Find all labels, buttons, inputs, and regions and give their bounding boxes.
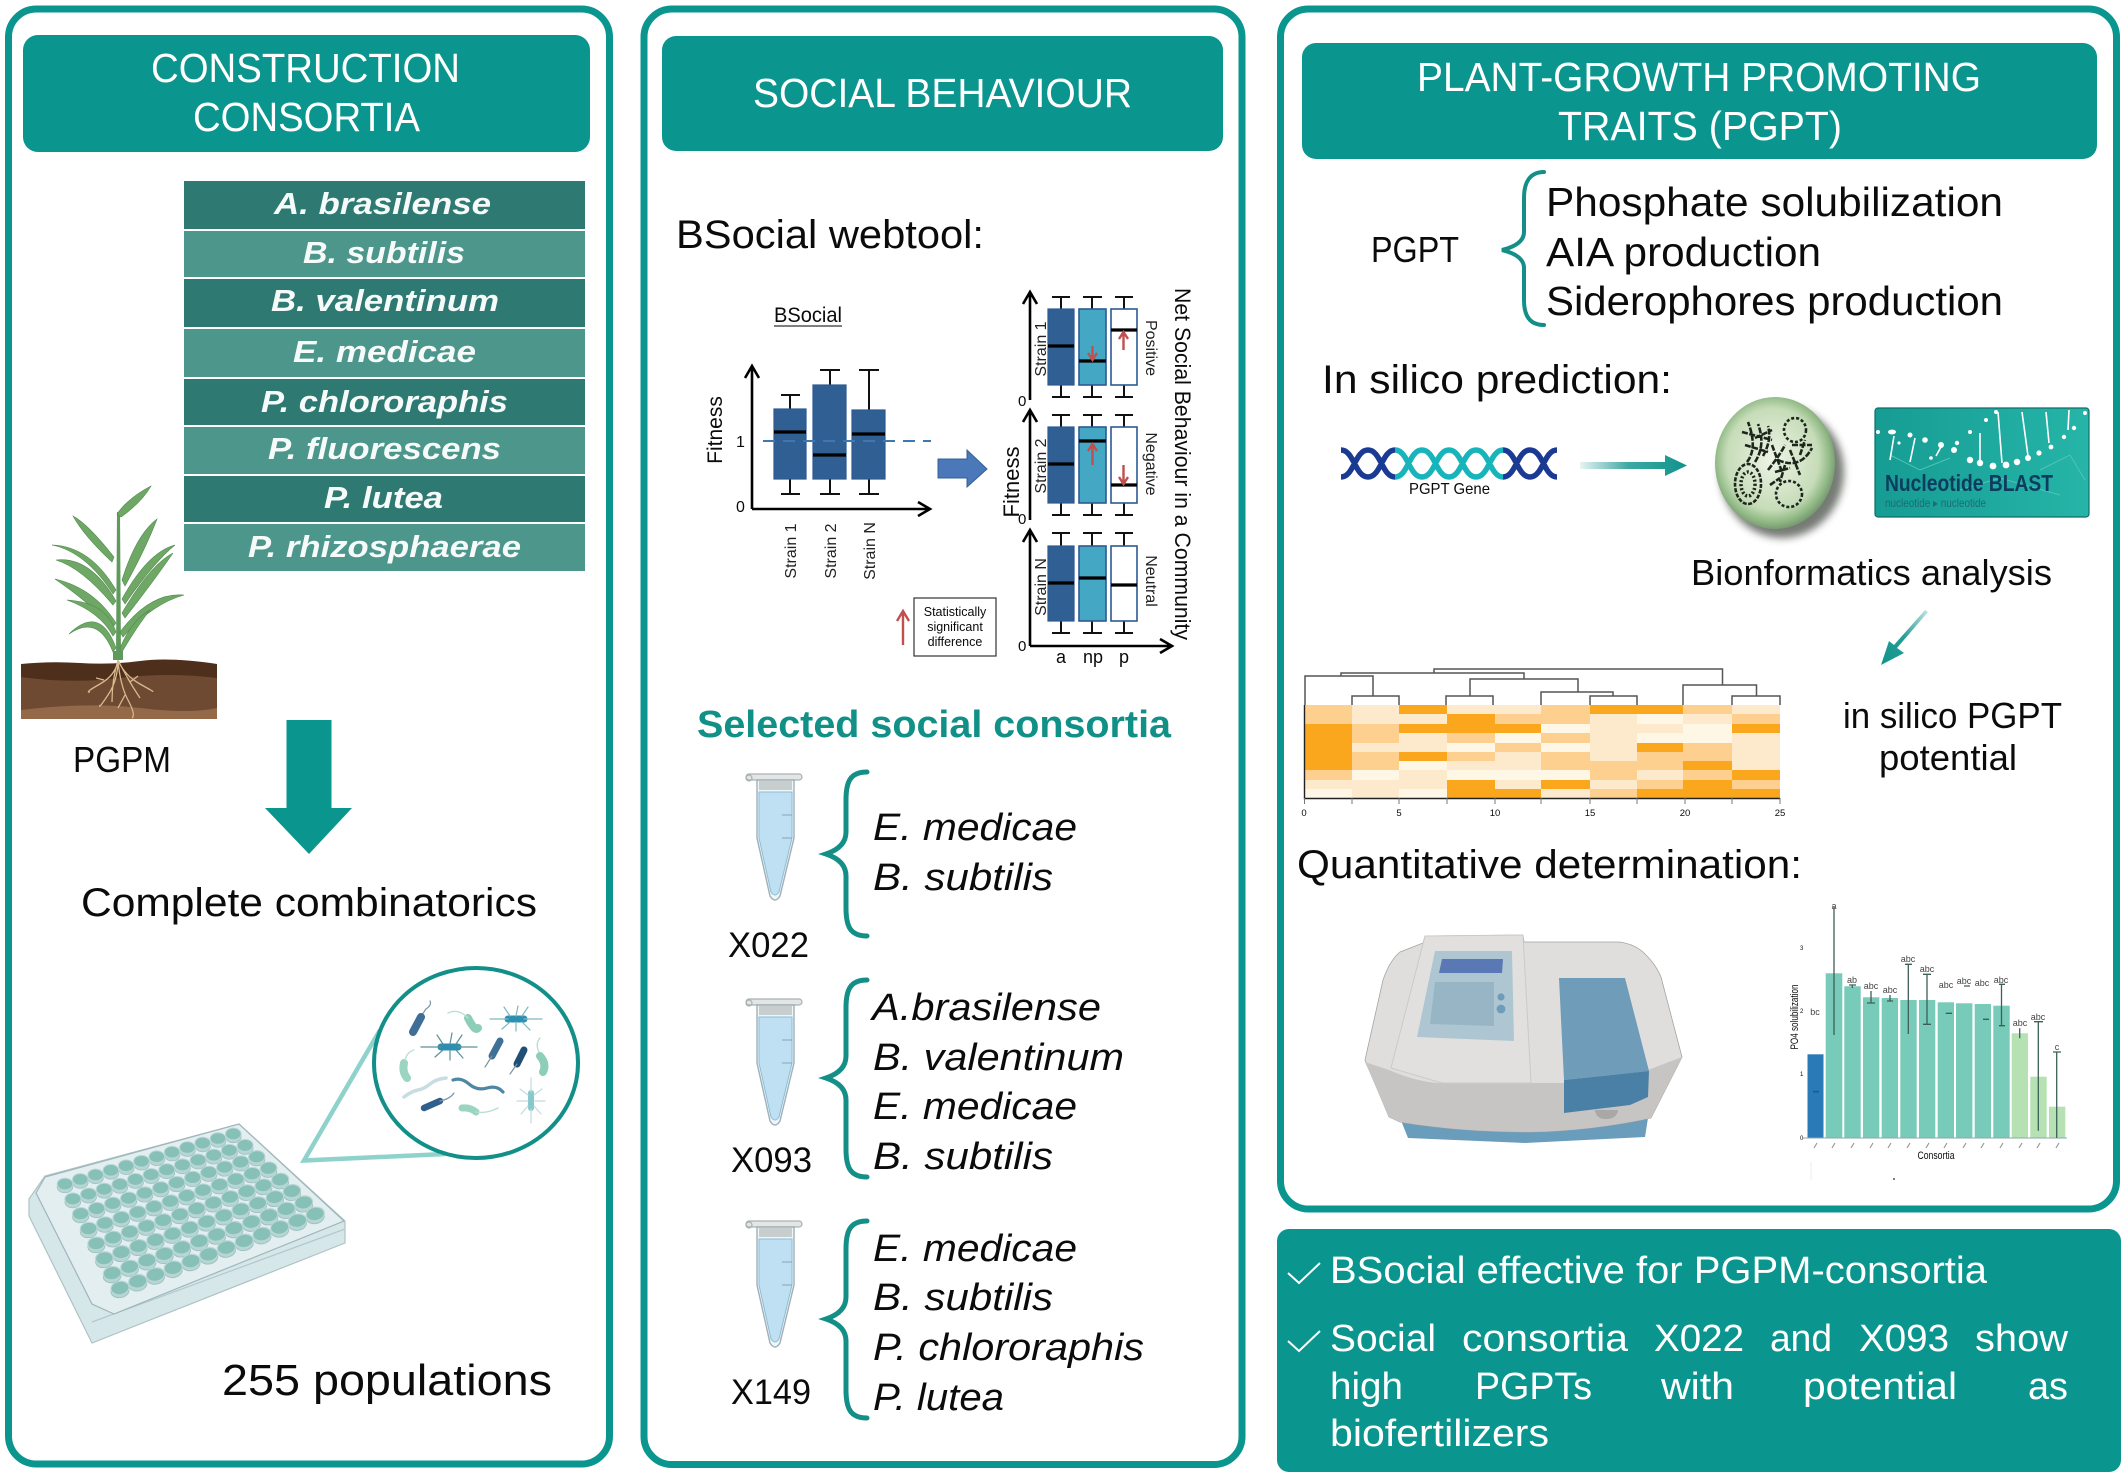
chart: net social behaviour boxplots: a — [1056, 647, 1067, 667]
consortium X149: X149 — [731, 1373, 811, 1412]
species table: A. brasilense — [273, 186, 491, 221]
PGPT trait list: PGPT — [1371, 229, 1459, 270]
heading: social behaviour: SOCIAL BEHAVIOUR — [753, 70, 1132, 116]
conclusion 2: consortia — [1462, 1318, 1629, 1360]
chart: PO4 solubilization bars: abc — [1939, 980, 1954, 990]
consortium X149: P. chlororaphis — [873, 1327, 1144, 1369]
consortium X022: E. medicae — [873, 807, 1077, 849]
chart: net social behaviour boxplots: Strain N — [1033, 558, 1050, 616]
conclusion 2: X093 — [1859, 1318, 1949, 1360]
heading: selected social consortia: Selected social consortia — [697, 704, 1172, 746]
icon: PGPT gene helix: PGPT Gene — [1409, 481, 1490, 498]
heading: PGPT: PLANT-GROWTH PROMOTING — [1417, 54, 1981, 100]
heading: construction consortia: CONSORTIA — [193, 94, 421, 140]
chart: PO4 solubilization bars: 2 — [1800, 1009, 1804, 1015]
chart: net social behaviour boxplots: p — [1119, 647, 1129, 667]
chart: net social behaviour boxplots: Fitness — [999, 447, 1024, 517]
legend: statistically significant difference — [897, 598, 996, 656]
species table: P. lutea — [324, 480, 443, 515]
PGPT trait list: Siderophores production — [1546, 278, 2003, 324]
consortium X093 — [731, 980, 1124, 1180]
conclusion 2: high — [1330, 1366, 1403, 1408]
chart: PO4 solubilization bars: 0 — [1800, 1136, 1804, 1142]
conclusion 2: potential — [1803, 1366, 1957, 1408]
chart: PO4 solubilization bars: a — [1831, 901, 1837, 911]
chart: PO4 solubilization bars: abc — [1864, 981, 1879, 991]
arrow: blue block — [938, 450, 987, 487]
conclusion 2: Social — [1330, 1318, 1436, 1360]
chart: net social behaviour boxplots: Strain 2 — [1033, 438, 1050, 494]
conclusion 2: and — [1770, 1318, 1832, 1360]
label: 255 populations: 255 populations — [222, 1356, 552, 1405]
icon: check 2 — [1288, 1331, 1320, 1351]
label: in silico prediction: In silico prediction: — [1322, 358, 1672, 402]
conclusion 1: BSocial effective for PGPM-consortia — [1330, 1250, 1988, 1292]
chart: BSocial fitness boxplot — [704, 304, 931, 580]
species table: B. valentinum — [271, 283, 499, 318]
chart: PGPT heatmap with dendrogram: 0 — [1301, 808, 1307, 819]
chart: PO4 solubilization bars: abc — [1883, 985, 1898, 995]
chart: PGPT heatmap with dendrogram: 15 — [1585, 808, 1595, 819]
consortium X149: B. subtilis — [873, 1277, 1053, 1319]
chart: net social behaviour boxplots: np — [1083, 647, 1103, 667]
heading: PGPT: TRAITS (PGPT) — [1558, 103, 1842, 149]
legend: statistically significant difference: significant — [927, 620, 983, 634]
arrow: bioinformatics to heatmap — [1881, 610, 1928, 665]
consortium X093: E. medicae — [873, 1086, 1077, 1128]
chart: net social behaviour boxplots — [999, 288, 1195, 667]
chart: PGPT heatmap with dendrogram: 25 — [1775, 808, 1785, 819]
chart: net social behaviour boxplots: Net Social Behaviour in a Community — [1170, 288, 1195, 640]
chart: BSocial fitness boxplot: 0 — [736, 499, 745, 516]
conclusions box — [1277, 1229, 2121, 1472]
chart: PO4 solubilization bars: abc — [1920, 964, 1935, 974]
conclusion 2 — [1330, 1318, 2069, 1455]
chart: net social behaviour boxplots: 0 — [1018, 393, 1026, 410]
chart: net social behaviour boxplots: 0 — [1018, 511, 1026, 528]
chart: PO4 solubilization bars: abc — [1901, 954, 1916, 964]
chart: PO4 solubilization bars: 3 — [1800, 946, 1804, 952]
chart: PO4 solubilization bars — [1789, 901, 2067, 1180]
icon: nucleotide BLAST card: nucleotide ▸ nucleotide — [1885, 496, 1986, 510]
consortium X022 — [728, 772, 1077, 965]
conclusion 2: show — [1975, 1318, 2069, 1360]
chart: PO4 solubilization bars: abc — [1994, 975, 2009, 985]
species table: P. chlororaphis — [261, 384, 508, 419]
chart: PO4 solubilization bars: PO4 solubilization — [1789, 984, 1801, 1050]
chart: PGPT heatmap with dendrogram — [1301, 669, 1785, 819]
heading: social behaviour — [662, 36, 1223, 151]
arrow: gene to bioinformatics — [1580, 455, 1687, 476]
chart: BSocial fitness boxplot: Fitness — [704, 396, 727, 464]
consortium X149: E. medicae — [873, 1228, 1077, 1270]
consortium X149 — [731, 1221, 1144, 1419]
label: in silico PGPT potential: potential — [1879, 737, 2017, 778]
chart: net social behaviour boxplots: Negative — [1142, 432, 1159, 496]
icon: petri dish colony — [1715, 397, 1844, 538]
label: PGPM: PGPM — [73, 739, 171, 780]
label: complete combinatorics: Complete combinatorics — [81, 881, 537, 925]
chart: BSocial fitness boxplot: 1 — [736, 434, 745, 451]
label: in silico PGPT potential — [1843, 695, 2062, 778]
icon: check 1 — [1288, 1263, 1320, 1283]
chart: PGPT heatmap with dendrogram: 10 — [1490, 808, 1500, 819]
label: quantitative determination: Quantitative determination: — [1297, 843, 1802, 887]
PGPT trait list — [1371, 172, 2003, 325]
consortium X022: B. subtilis — [873, 857, 1053, 899]
consortium X149: P. lutea — [873, 1377, 1004, 1419]
panel: construction consortia — [8, 9, 610, 1464]
chart: BSocial fitness boxplot: BSocial — [774, 304, 842, 327]
chart: BSocial fitness boxplot: Strain N — [862, 522, 879, 580]
species table: P. fluorescens — [268, 431, 501, 466]
consortium X093: B. subtilis — [873, 1136, 1053, 1178]
chart: net social behaviour boxplots: Strain 1 — [1033, 321, 1050, 377]
chart: PO4 solubilization bars: abc — [2031, 1012, 2046, 1022]
conclusion 2: with — [1660, 1366, 1734, 1408]
icon: spectrophotometer — [1365, 935, 1682, 1143]
chart: BSocial fitness boxplot: Strain 1 — [783, 523, 800, 579]
chart: net social behaviour boxplots: Neutral — [1142, 555, 1159, 607]
icon: magnified bacteria — [304, 968, 578, 1160]
heading: construction consortia: CONSTRUCTION — [151, 45, 460, 91]
icon: plant with soil — [21, 486, 217, 719]
consortium X093: B. valentinum — [873, 1037, 1124, 1079]
panel: plant-growth promoting traits — [1280, 9, 2116, 1209]
consortium X093: X093 — [731, 1141, 812, 1180]
icon: nucleotide BLAST card — [1875, 408, 2089, 517]
chart: PO4 solubilization bars: 1 — [1800, 1072, 1804, 1078]
icon: nucleotide BLAST card: Nucleotide BLAST — [1885, 470, 2053, 496]
label: in silico PGPT potential: in silico PGPT — [1843, 695, 2062, 736]
PGPT trait list: Phosphate solubilization — [1546, 179, 2003, 225]
chart: net social behaviour boxplots: Positive — [1142, 320, 1159, 376]
chart: PGPT heatmap with dendrogram: 5 — [1396, 808, 1402, 819]
legend: statistically significant difference: Statistically — [924, 605, 987, 619]
consortium X022: X022 — [728, 926, 809, 965]
chart: PO4 solubilization bars: c — [2055, 1042, 2060, 1052]
chart: net social behaviour boxplots: 0 — [1018, 638, 1026, 655]
species table: B. subtilis — [303, 235, 465, 270]
legend: statistically significant difference: difference — [928, 635, 982, 649]
chart: PO4 solubilization bars: bc — [1810, 1007, 1820, 1017]
chart: PGPT heatmap with dendrogram: 20 — [1680, 808, 1690, 819]
chart: PO4 solubilization bars: ab — [1847, 975, 1857, 985]
chart: PO4 solubilization bars: abc — [2013, 1018, 2028, 1028]
species table — [184, 181, 585, 571]
PGPT trait list: AIA production — [1546, 229, 1821, 275]
chart: BSocial fitness boxplot: Strain 2 — [823, 523, 840, 579]
panel: social behaviour — [644, 9, 1242, 1464]
icon: PGPT gene helix — [1341, 450, 1557, 498]
consortium X093: A.brasilense — [870, 987, 1101, 1029]
species table: E. medicae — [293, 334, 476, 369]
conclusion 2: biofertilizers — [1330, 1413, 1549, 1455]
label: bioinformatics analysis: Bionformatics analysis — [1691, 552, 2052, 593]
conclusion 2: PGPTs — [1475, 1366, 1592, 1408]
species table: P. rhizosphaerae — [248, 529, 521, 564]
chart: PO4 solubilization bars: abc — [1975, 978, 1990, 988]
conclusion 2: X022 — [1654, 1318, 1744, 1360]
heading: PGPT — [1302, 43, 2097, 159]
chart: PO4 solubilization bars: abc — [1957, 976, 1972, 986]
arrow: down — [265, 720, 352, 854]
label: BSocial webtool: BSocial webtool: — [676, 213, 984, 257]
chart: PO4 solubilization bars: Consortia — [1918, 1150, 1955, 1162]
heading: construction consortia — [23, 35, 590, 152]
conclusion 2: as — [2028, 1366, 2068, 1408]
icon: microplate — [29, 1124, 345, 1343]
